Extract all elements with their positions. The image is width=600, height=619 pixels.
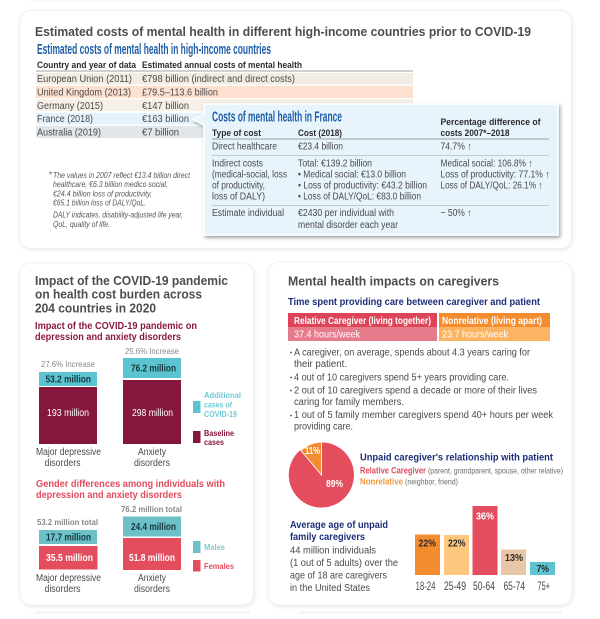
legend: gender: Males bbox=[204, 542, 225, 552]
callout: costs of mental health in France: • Medical social: €13.0 billion bbox=[298, 170, 406, 180]
bullet list: caregiver facts: 1 out of 5 family member caregivers spend 40+ hours per week bbox=[294, 410, 554, 421]
table: high-income countries: €163 billion bbox=[142, 114, 189, 125]
callout: costs of mental health in France: (medical-social, loss bbox=[212, 170, 287, 180]
bullet list: caregiver facts bbox=[290, 348, 554, 432]
table: high-income countries: United Kingdom (2013) bbox=[37, 88, 131, 98]
text block: average age: age of 18 are caregivers bbox=[290, 570, 387, 582]
text block: average age: 44 million individuals bbox=[290, 546, 376, 556]
table: high-income countries: Australia (2019) bbox=[37, 128, 101, 138]
bar chart: additional and baseline cases: disorders bbox=[134, 458, 170, 469]
bar chart: caregiver age: 7% bbox=[536, 564, 549, 575]
bar chart: males and females: disorders bbox=[44, 584, 80, 595]
footnote: €24.4 billion loss of productivity, bbox=[53, 188, 152, 198]
bar chart: additional and baseline cases: 193 million bbox=[47, 408, 89, 419]
table: hours per week: Relative Caregiver (living together) bbox=[294, 316, 431, 327]
footnote: healthcare, €6.3 billion medico social, bbox=[53, 179, 168, 189]
callout: costs of mental health in France: Indirect costs bbox=[212, 158, 263, 170]
callout: costs of mental health in France: Costs of mental health in France bbox=[212, 110, 342, 126]
heading: COVID-19 impact title: 204 countries in 2020 bbox=[35, 300, 156, 316]
table: high-income countries: France (2018) bbox=[37, 114, 93, 125]
table: high-income countries: Germany (2015) bbox=[37, 101, 103, 112]
table: hours per week: Nonrelative (living apart) bbox=[442, 316, 542, 327]
bar chart: caregiver age: 13% bbox=[505, 553, 523, 564]
text block: average age: family caregivers bbox=[290, 532, 365, 543]
text block: average age: in the United States bbox=[290, 583, 370, 594]
pie chart: caregiver relationship: 11% bbox=[305, 446, 320, 457]
bar chart: additional and baseline cases: Anxiety bbox=[138, 447, 166, 458]
callout: costs of mental health in France: €2430 per individual with bbox=[298, 208, 394, 219]
callout: costs of mental health in France: mental disorder each year bbox=[298, 220, 399, 231]
pie chart: caregiver relationship bbox=[288, 442, 354, 508]
bar chart: caregiver age bbox=[415, 506, 555, 593]
callout: costs of mental health in France bbox=[193, 104, 558, 235]
callout: costs of mental health in France: 74.7% ↑ bbox=[440, 142, 472, 152]
heading: costs panel title: Estimated costs of mental health in different high-income countries prior to COVID-19 bbox=[35, 24, 531, 39]
callout: costs of mental health in France: Loss of productivity: 77.1% ↑ bbox=[440, 170, 550, 180]
subheading: gender differences: Gender differences among individuals with bbox=[36, 479, 225, 490]
bar chart: caregiver age: 22% bbox=[418, 538, 436, 550]
text block: average age: (1 out of 5 adults) over the bbox=[290, 558, 398, 569]
callout: costs of mental health in France: Cost (2018) bbox=[298, 128, 342, 139]
legend: case types: Baseline bbox=[204, 428, 234, 438]
bullet list: caregiver facts: 2 out of 10 caregivers spend a decade or more of their lives bbox=[294, 386, 537, 396]
bar chart: additional and baseline cases: 76.2 million bbox=[131, 364, 176, 374]
bar chart: males and females bbox=[36, 504, 182, 595]
table: high-income countries: €798 billion (indirect and direct costs) bbox=[142, 74, 295, 85]
bullet list: caregiver facts: caring for family members. bbox=[294, 397, 404, 408]
table: high-income countries bbox=[36, 42, 413, 138]
bar chart: males and females: 35.5 million bbox=[46, 553, 93, 564]
bar chart: additional and baseline cases: disorders bbox=[44, 458, 80, 469]
bar chart: additional and baseline cases: 298 million bbox=[132, 408, 173, 419]
table: high-income countries: €7 billion bbox=[142, 128, 179, 138]
legend: relationship with patient: (neighbor, friend) bbox=[405, 476, 458, 486]
bar chart: males and females: Major depressive bbox=[36, 573, 101, 584]
callout: costs of mental health in France: • Loss of productivity: €43.2 billion bbox=[298, 180, 427, 192]
footnote bbox=[48, 170, 191, 229]
callout: costs of mental health in France: Loss of DALY/QoL: 26.1% ↑ bbox=[440, 180, 542, 192]
callout: costs of mental health in France: costs 2007*–2018 bbox=[440, 128, 510, 139]
legend: case types: Additional bbox=[204, 390, 241, 400]
footnote: DALY indicates, disability-adjusted life year, bbox=[53, 210, 183, 220]
subheading: depression and anxiety impact bbox=[35, 321, 197, 343]
table: high-income countries: €147 billion bbox=[142, 101, 189, 112]
legend: gender: Females bbox=[204, 561, 234, 571]
legend: gender bbox=[193, 541, 234, 572]
bullet list: caregiver facts: A caregiver, on average, spends about 4.3 years caring for bbox=[294, 348, 531, 358]
legend: case types: cases of bbox=[204, 400, 232, 410]
legend: case types bbox=[193, 390, 241, 447]
subheading: depression and anxiety impact: depression and anxiety disorders bbox=[35, 332, 181, 343]
callout: costs of mental health in France: Estimate individual bbox=[212, 208, 284, 219]
table: high-income countries: Estimated costs of mental health in high-income countries bbox=[37, 42, 271, 58]
footnote: * bbox=[48, 170, 52, 180]
pie chart: caregiver relationship: 89% bbox=[326, 479, 343, 490]
bar chart: additional and baseline cases: 53.2 million bbox=[46, 374, 91, 386]
bar chart: caregiver age: 75+ bbox=[538, 579, 550, 593]
bar chart: additional and baseline cases: 27.6% Increase bbox=[41, 359, 95, 369]
bullet list: caregiver facts: providing care. bbox=[294, 422, 353, 432]
table: high-income countries: Estimated annual costs of mental health bbox=[142, 60, 302, 71]
panel: impact of COVID-19 bbox=[20, 263, 254, 605]
bar chart: males and females: 51.8 million bbox=[129, 553, 175, 564]
callout: costs of mental health in France: Direct healthcare bbox=[212, 142, 277, 152]
bar chart: additional and baseline cases bbox=[36, 346, 181, 469]
bar chart: males and females: 24.4 million bbox=[131, 522, 176, 533]
bar chart: males and females: 53.2 million total bbox=[37, 517, 98, 527]
bar chart: caregiver age: 36% bbox=[476, 512, 494, 522]
heading: COVID-19 impact title: on health cost burden across bbox=[35, 286, 202, 302]
heading: caregivers title: Mental health impacts on caregivers bbox=[288, 274, 499, 288]
subheading: gender differences bbox=[36, 479, 225, 501]
table: hours per week: 23.7 hours/week bbox=[442, 330, 509, 340]
callout: costs of mental health in France: Medical social: 106.8% ↑ bbox=[440, 158, 532, 170]
callout: costs of mental health in France: of productivity, bbox=[212, 180, 265, 192]
bullet list: caregiver facts: 4 out of 10 caregivers spend 5+ years providing care. bbox=[294, 372, 509, 384]
footnote: €65.1 billion loss of DALY/QoL. bbox=[53, 198, 146, 208]
legend: case types: cases bbox=[204, 437, 224, 447]
legend: relationship with patient: Unpaid caregiver's relationship with patient bbox=[360, 452, 554, 464]
heading: COVID-19 impact title: Impact of the COVID-19 pandemic bbox=[35, 273, 228, 288]
panel: estimated costs of mental health bbox=[20, 10, 572, 248]
bullet list: caregiver facts: their patient. bbox=[294, 359, 347, 370]
text block: average age bbox=[290, 520, 398, 594]
table: hours per week bbox=[288, 313, 550, 341]
callout: costs of mental health in France: Total: €139.2 billion bbox=[298, 158, 372, 170]
callout: costs of mental health in France: ~ 50% ↑ bbox=[440, 208, 472, 219]
bar chart: additional and baseline cases: Major depressive bbox=[36, 447, 101, 458]
bar chart: caregiver age: 25-49 bbox=[444, 579, 466, 593]
table: high-income countries: European Union (2011) bbox=[37, 74, 132, 85]
bar chart: males and females: 17.7 million bbox=[46, 532, 91, 544]
callout: costs of mental health in France: • Loss of DALY/QoL: €83.0 billion bbox=[298, 192, 421, 202]
subheading: depression and anxiety impact: Impact of the COVID-19 pandemic on bbox=[35, 321, 197, 332]
panel: caregivers bbox=[268, 262, 572, 605]
subheading: time spent: Time spent providing care between caregiver and patient bbox=[288, 297, 541, 308]
table: high-income countries: £79.5–113.6 billion bbox=[142, 88, 218, 98]
bar chart: additional and baseline cases: 25.6% Increase bbox=[125, 346, 179, 356]
callout: costs of mental health in France: €23.4 billion bbox=[298, 142, 343, 152]
legend: relationship with patient: Relative Caregiver bbox=[360, 466, 426, 476]
bar chart: caregiver age: 22% bbox=[448, 538, 466, 550]
table: hours per week: 37.4 hours/week bbox=[294, 330, 361, 340]
legend: relationship with patient: Nonrelative bbox=[360, 476, 403, 486]
bar chart: males and females: 76.2 million total bbox=[121, 504, 182, 514]
bar chart: males and females: disorders bbox=[134, 584, 170, 595]
bar chart: caregiver age: 18-24 bbox=[416, 579, 436, 593]
legend: relationship with patient: (parent, grandparent, spouse, other relative) bbox=[428, 466, 563, 476]
bar chart: caregiver age: 50-64 bbox=[473, 579, 495, 593]
bar chart: males and females: Anxiety bbox=[138, 573, 166, 584]
callout: costs of mental health in France: loss of DALY) bbox=[212, 192, 265, 202]
footnote: QoL, quality of life. bbox=[53, 219, 110, 229]
bar chart: caregiver age: 65-74 bbox=[504, 579, 525, 593]
callout: costs of mental health in France: Percentage difference of bbox=[440, 117, 541, 128]
legend: case types: COVID-19 bbox=[204, 409, 237, 419]
table: high-income countries: Country and year of data bbox=[37, 60, 137, 71]
footnote: The values in 2007 reflect €13.4 billion direct bbox=[53, 170, 191, 180]
subheading: gender differences: depression and anxiety disorders bbox=[36, 490, 182, 501]
heading: COVID-19 impact title bbox=[35, 273, 228, 316]
legend: relationship with patient bbox=[360, 452, 563, 486]
callout: costs of mental health in France: Type of cost bbox=[212, 128, 262, 139]
text block: average age: Average age of unpaid bbox=[290, 520, 388, 531]
